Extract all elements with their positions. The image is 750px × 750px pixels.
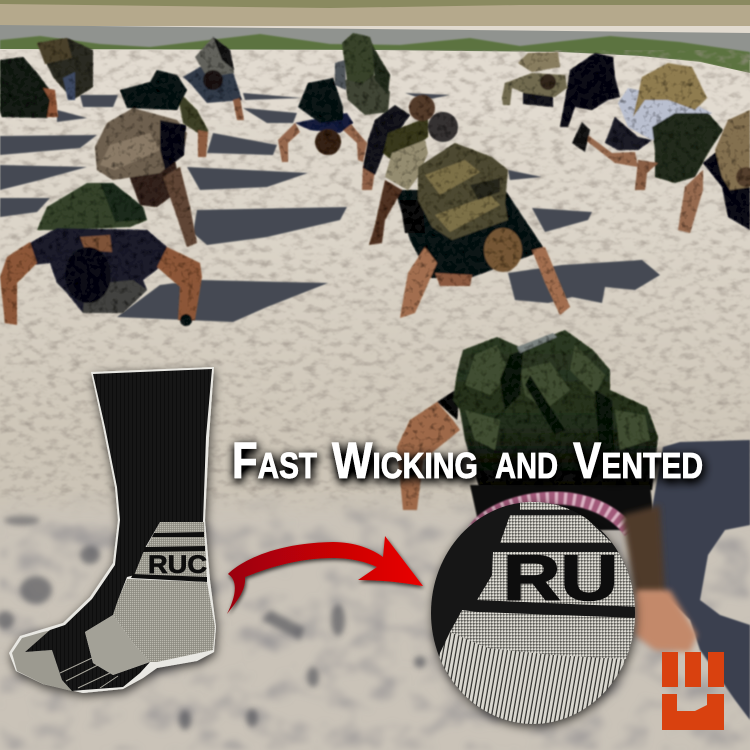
recruit with tan pack [95,70,208,247]
recruit far right [678,110,750,233]
blurred brown leg [622,505,665,595]
sock white outline [9,367,216,693]
sock grey arch pad [85,615,150,675]
sock logo text: RUC [148,551,207,579]
foreground arm [397,402,460,510]
headline: VENTED [573,432,703,489]
recruit green pack [335,33,390,115]
sock sole stripes [60,658,118,688]
recruit with far right tan pack group [572,63,723,190]
sock grey heel [113,579,215,662]
recruit top right black [560,53,620,127]
dark waist band [470,485,655,530]
striped pink sock band [474,498,630,532]
recruit centre left far [183,37,244,120]
circle knit panel with logo [477,502,640,614]
recruits doing push-ups [0,33,750,510]
magnified detail circle [430,502,640,730]
blurred shadow on sand [650,440,750,720]
headline [232,432,703,489]
sock black cuff and upper [25,369,212,691]
sand shadows of people [0,93,660,322]
recruit top right tan [502,52,567,107]
headline: FAST [232,432,317,489]
circle ribbed cuff [440,632,626,724]
sock grey toe [12,630,72,691]
blurred calf [635,590,697,652]
left recruit [0,183,202,326]
foreground backpack [453,330,658,490]
blurred sand foreground [0,485,750,750]
foreground blurred legs and shadow [470,440,750,720]
recruit brown hair [362,95,435,190]
sock vent panel with logo [131,522,207,582]
headline: WICKING [332,432,478,489]
recruit dark pack [278,78,367,162]
headline: AND [495,445,558,486]
sock product image [9,367,216,693]
recruits top left [0,38,93,118]
centre recruit [369,112,570,318]
red curved arrow [227,536,423,614]
circle grey knit [440,610,640,665]
circle logo text: RU [503,542,618,614]
brand logo [662,652,724,730]
